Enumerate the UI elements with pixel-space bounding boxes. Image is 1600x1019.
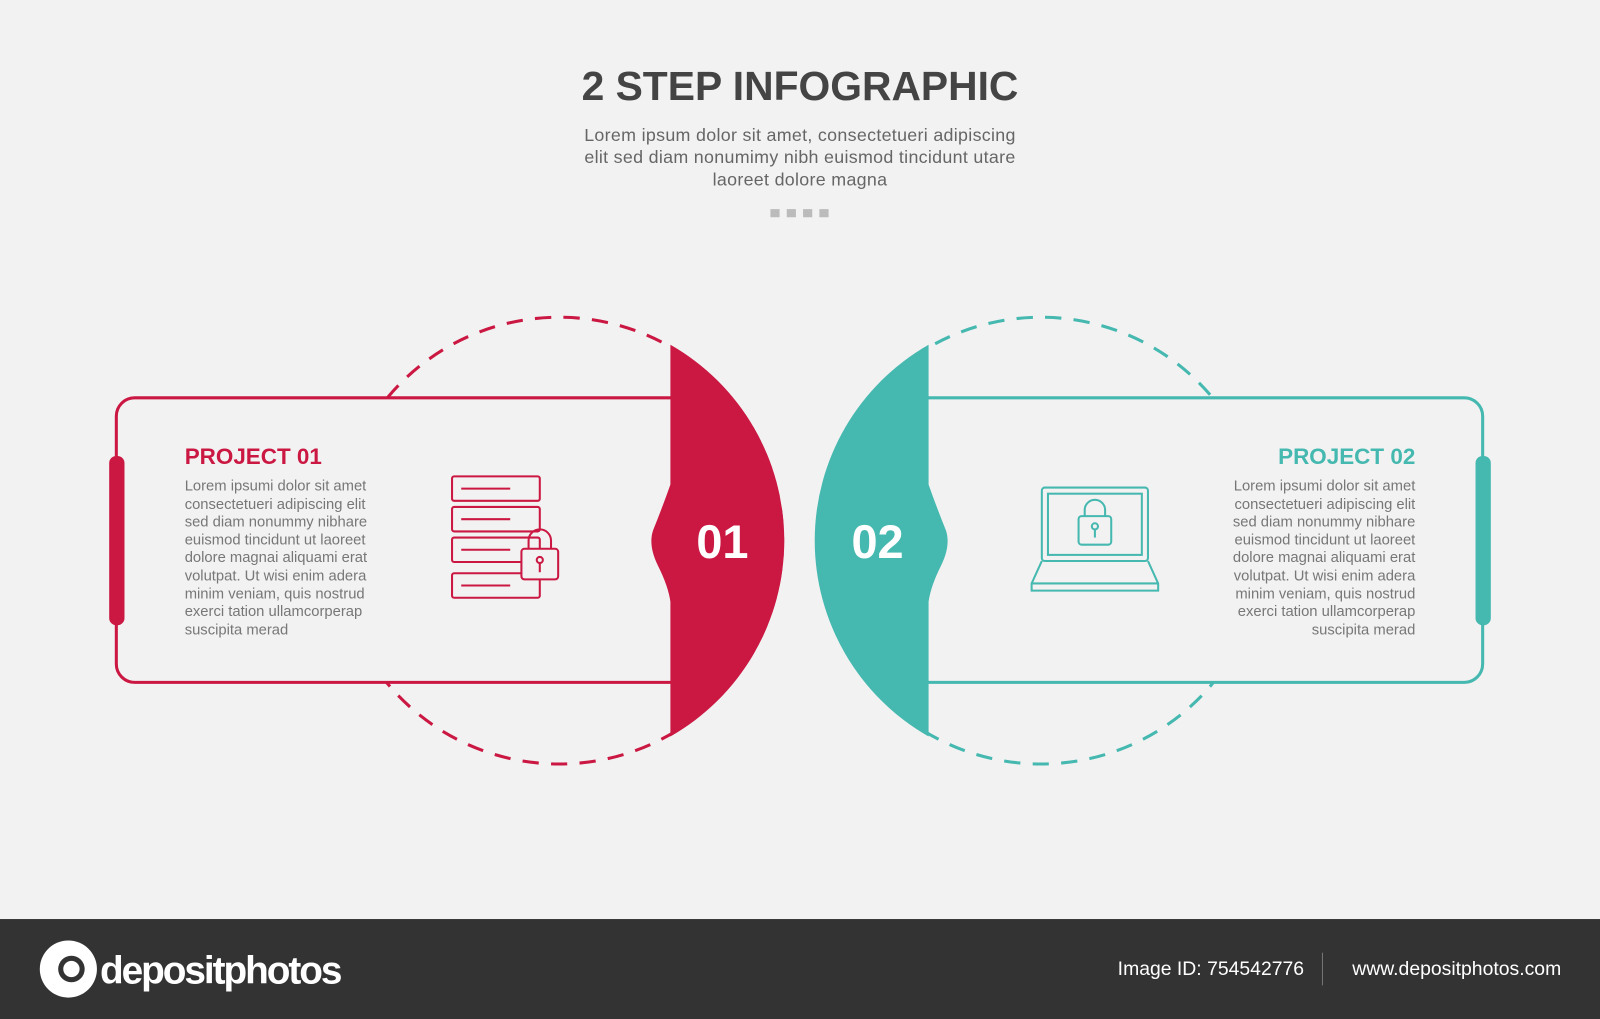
title: 2 STEP INFOGRAPHIC — [582, 63, 1018, 109]
dashed circle 1 — [336, 317, 783, 764]
dashed circle 2 — [817, 317, 1264, 764]
step 1 — [109, 317, 784, 764]
body text 2: Lorem ipsumi dolor sit amet — [1234, 479, 1415, 495]
card 1 — [116, 398, 708, 682]
body text 2: consectetueri adipiscing elit — [1235, 497, 1415, 513]
body text 2: exerci tation ullamcorperap — [1238, 604, 1415, 620]
segment 2 — [815, 345, 948, 736]
heading project 02: PROJECT 02 — [1278, 444, 1415, 469]
body text 2: euismod tincidunt ut laoreet — [1234, 533, 1415, 549]
body text 1: consectetueri adipiscing elit — [185, 497, 365, 513]
body text 1: euismod tincidunt ut laoreet — [185, 533, 366, 549]
icon: laptop with lock — [1032, 488, 1158, 591]
subtitle — [584, 125, 1016, 190]
subtitle: elit sed diam nonumimy nibh euismod tincidunt utare — [584, 147, 1016, 167]
step 2 — [815, 317, 1491, 764]
footer logo: depositphotos — [100, 949, 341, 992]
body text 2: sed diam nonummy nibhare — [1233, 514, 1415, 530]
body text 2: dolore magnai aliquami erat — [1233, 550, 1415, 566]
side bar 2 — [1476, 456, 1491, 625]
subtitle: laoreet dolore magna — [713, 170, 887, 190]
body text 1: minim veniam, quis nostrud — [185, 587, 365, 603]
footer info: Image ID: 754542776 — [1118, 958, 1304, 980]
heading project 01: PROJECT 01 — [185, 444, 322, 469]
body text 1 — [185, 479, 367, 638]
side bar 1 — [109, 456, 124, 625]
body text 2: suscipita merad — [1312, 622, 1415, 638]
footer bar — [0, 919, 1600, 1019]
card 2 — [892, 398, 1483, 682]
dots divider — [770, 209, 829, 217]
body text 1: exerci tation ullamcorperap — [185, 604, 362, 620]
body text 1: Lorem ipsumi dolor sit amet — [185, 479, 366, 495]
footer logo — [40, 940, 341, 998]
body text 1: sed diam nonummy nibhare — [185, 514, 367, 530]
body text 2: volutpat. Ut wisi enim adera — [1234, 568, 1416, 584]
number 02: 02 — [851, 516, 904, 568]
body text 1: suscipita merad — [185, 622, 288, 638]
body text 2: minim veniam, quis nostrud — [1235, 587, 1415, 603]
segment 1 — [651, 345, 784, 736]
footer bar: www.depositphotos.com — [1351, 958, 1561, 980]
number 01: 01 — [696, 516, 749, 568]
icon: server with lock — [452, 476, 558, 598]
body text 1: volutpat. Ut wisi enim adera — [185, 568, 367, 584]
body text 1: dolore magnai aliquami erat — [185, 550, 367, 566]
subtitle: Lorem ipsum dolor sit amet, consectetueri adipiscing — [584, 125, 1016, 145]
body text 2 — [1233, 479, 1416, 638]
